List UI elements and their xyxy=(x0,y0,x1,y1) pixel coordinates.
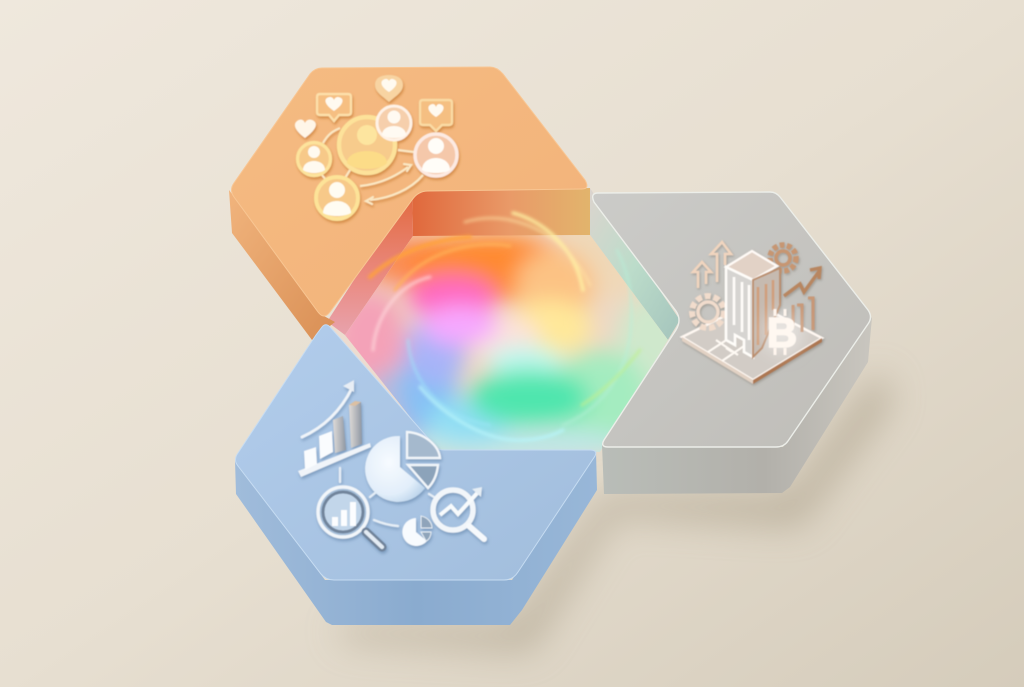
magnifier with bars xyxy=(318,487,382,547)
swirl walls xyxy=(325,188,680,340)
orange top face xyxy=(232,67,587,316)
bottom person xyxy=(316,177,358,219)
orange side xyxy=(229,190,335,340)
heart xyxy=(295,120,316,138)
trend arrow xyxy=(784,268,820,296)
tower xyxy=(726,251,780,357)
gray side xyxy=(602,317,872,494)
pin heart xyxy=(375,75,403,102)
gray top face xyxy=(593,192,870,447)
magnifier with trend xyxy=(433,487,484,539)
central rainbow swirl xyxy=(320,185,685,463)
swirl colour clouds xyxy=(345,235,668,452)
connectors xyxy=(322,128,423,204)
connectors xyxy=(340,468,434,526)
small pie chart xyxy=(402,516,432,546)
gears xyxy=(692,245,796,328)
blue side xyxy=(235,451,597,625)
large pie chart xyxy=(365,432,440,502)
top right person xyxy=(377,106,411,140)
bitcoin symbol: B xyxy=(767,309,797,356)
icon: analytics charts, pies and magnifiers xyxy=(298,380,484,547)
block shadows xyxy=(335,370,892,650)
small bars xyxy=(793,298,813,332)
right person xyxy=(415,134,457,176)
panel: gray hexagon block xyxy=(593,192,872,494)
blue top face xyxy=(236,325,596,580)
base plate xyxy=(682,302,822,384)
icon: social network of people and hearts xyxy=(295,75,457,219)
panel: blue hexagon block xyxy=(235,325,597,625)
panel: orange hexagon block xyxy=(229,67,587,340)
bubble heart left xyxy=(317,94,351,121)
arrows xyxy=(693,242,731,288)
left person xyxy=(298,142,330,176)
swirl light arcs xyxy=(370,213,640,440)
icon: building with gears, arrows and bitcoin xyxy=(682,242,822,384)
bubble heart right xyxy=(420,100,452,131)
large person xyxy=(339,117,395,173)
bar chart xyxy=(298,380,371,477)
